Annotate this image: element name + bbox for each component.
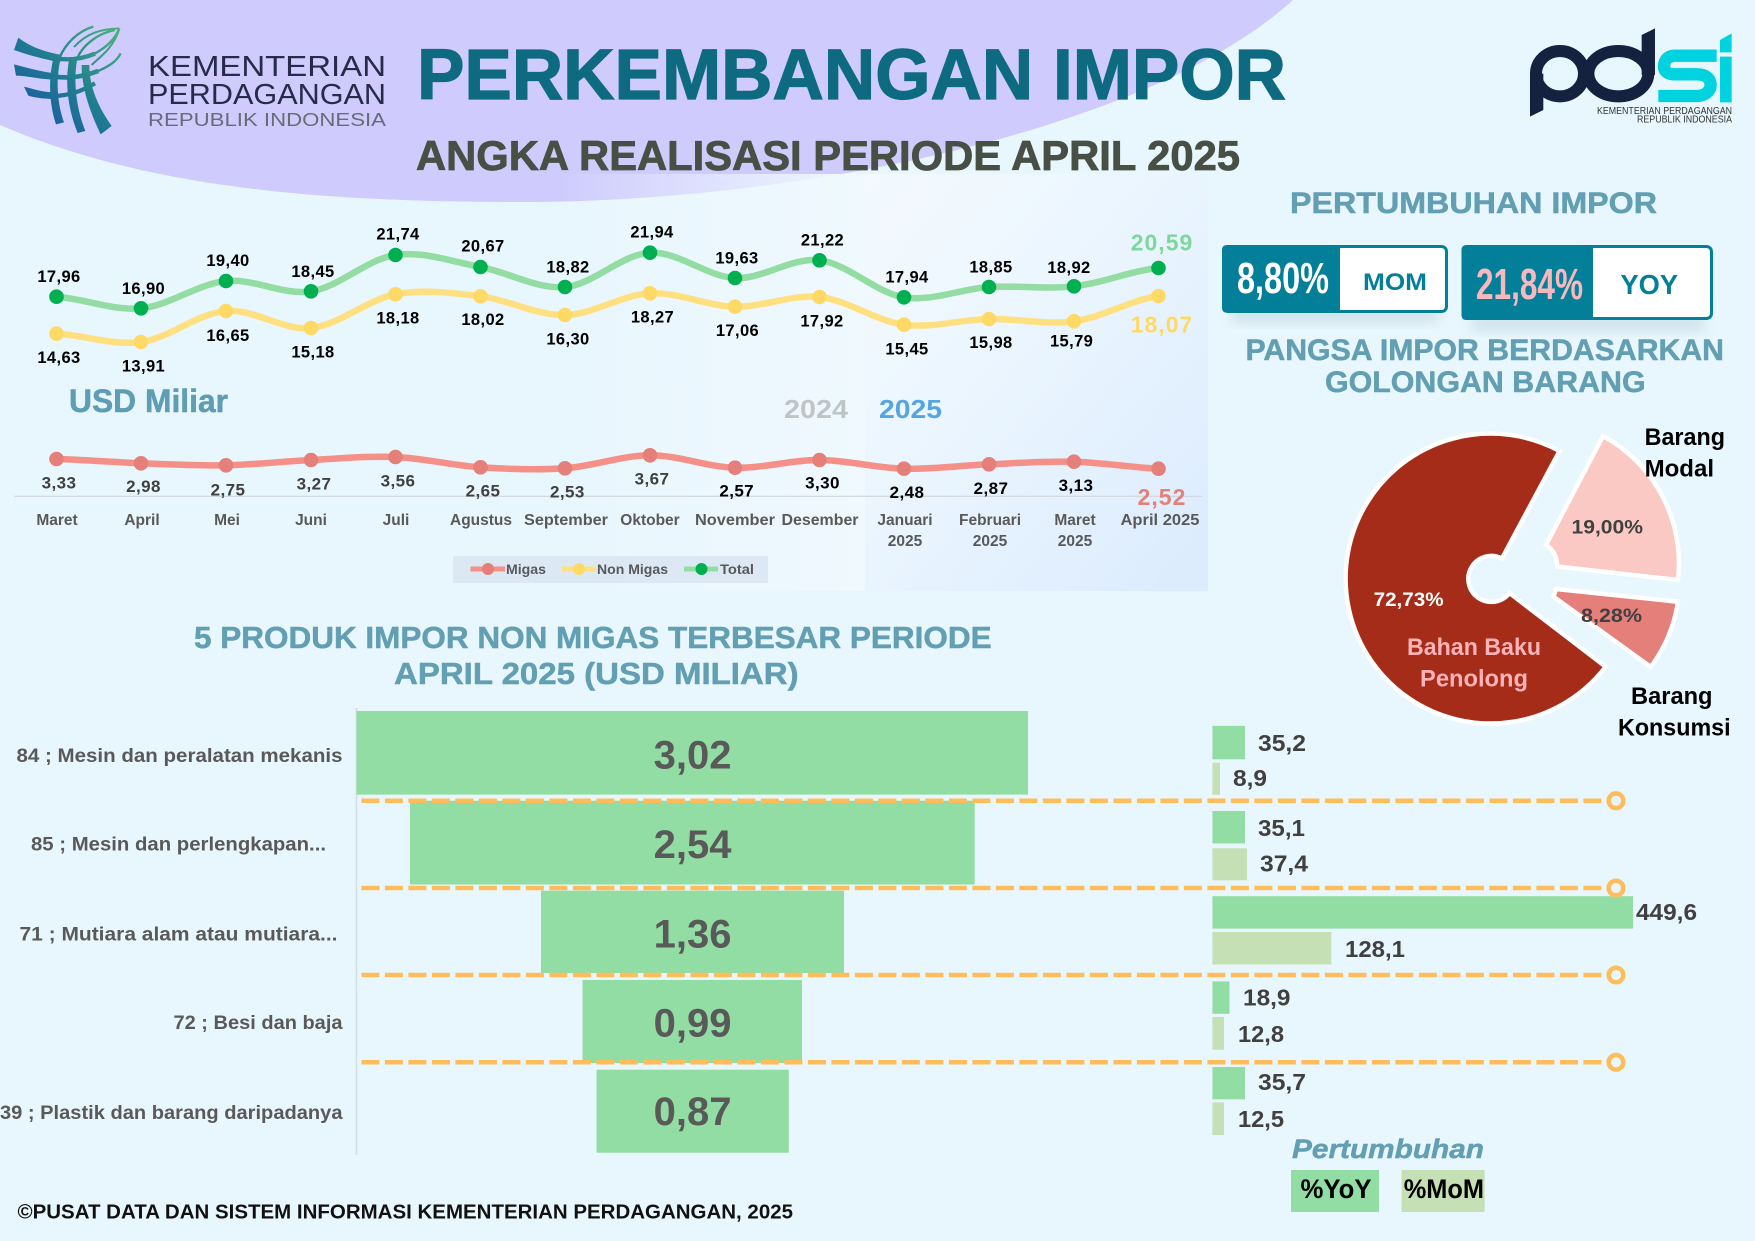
x axis month labels: Maret: [1054, 512, 1096, 529]
card: YoY growth: 21,84%: [1476, 260, 1583, 309]
heading: top 5 products: [194, 620, 992, 691]
series: Total: 21,74: [376, 226, 420, 244]
series: Total: 21,22: [801, 232, 844, 250]
series: Non Migas: [37, 286, 1193, 375]
logo wordmark: REPUBLIK INDONESIA: [148, 110, 386, 130]
x axis month labels: Oktober: [620, 512, 680, 529]
series: Non Migas: 18,27: [631, 308, 674, 326]
series: Non Migas: 17,06: [716, 322, 759, 340]
pdsi caption: KEMENTERIAN PERDAGANGAN: [1597, 106, 1732, 117]
series: Migas: 3,13: [1059, 476, 1093, 495]
slice: Barang Modal: [1546, 436, 1679, 580]
card: MoM growth: [1222, 245, 1446, 322]
series: Migas: 2,53: [550, 482, 585, 501]
x axis month labels: April 2025: [1120, 512, 1200, 529]
chart legend: Migas: [506, 561, 546, 577]
icon: Kemendag emblem: [14, 27, 121, 134]
growth row: HS 72: 12,8: [1238, 1021, 1284, 1047]
series: Total: 18,92: [1047, 259, 1091, 277]
growth bars: YoY and MoM: [1212, 726, 1697, 1135]
label: Barang Konsumsi: Barang: [1631, 683, 1712, 710]
series: Non Migas: 16,65: [206, 327, 250, 345]
slice: Barang Konsumsi: 8,28%: [1581, 606, 1642, 627]
series: Total: 17,96: [37, 268, 81, 286]
logo: PDSI: [1530, 28, 1732, 126]
x axis month labels: Mei: [214, 512, 240, 529]
year divider: [864, 197, 870, 591]
x axis month labels: November: [695, 512, 775, 529]
x axis month labels: Agustus: [450, 512, 512, 529]
x axis month labels: Desember: [782, 512, 858, 529]
title: PERKEMBANGAN IMPOR: [417, 36, 1286, 115]
series: Migas: 2,98: [126, 477, 161, 496]
pdsi caption: REPUBLIK INDONESIA: [1637, 114, 1732, 126]
2025 highlight panel: [560, 174, 1208, 591]
series: Migas: 3,33: [42, 473, 76, 492]
bar: HS 85: [31, 801, 975, 884]
card: MoM growth: 8,80%: [1237, 254, 1329, 303]
series: Total: 18,45: [291, 263, 335, 281]
bar: HS 84: 3,02: [654, 733, 732, 777]
label: Barang Modal: Modal: [1645, 456, 1714, 483]
bar: HS 84: [16, 711, 1028, 795]
slice: Bahan Baku Penolong: [1346, 434, 1606, 724]
chart legend: Total: [720, 561, 754, 577]
label: Barang Konsumsi: [1618, 683, 1731, 742]
slice: Barang Konsumsi: [1554, 589, 1678, 667]
bar: HS 72: [174, 980, 802, 1063]
slice: Bahan Baku Penolong: 72,73%: [1374, 590, 1444, 611]
x axis month labels: Februari: [959, 512, 1021, 529]
logo: Kementerian Perdagangan: [14, 27, 386, 134]
series: Migas: 3,67: [635, 470, 669, 489]
growth row: HS 71: 449,6: [1636, 899, 1697, 925]
x axis month labels: Maret: [36, 512, 78, 529]
legend: pertumbuhan: Pertumbuhan: [1292, 1134, 1484, 1164]
growth row: HS 85: 35,1: [1258, 815, 1305, 841]
growth row: HS 84: [1212, 726, 1306, 795]
growth row: HS 85: [1212, 811, 1308, 880]
bar: HS 72: 72 ; Besi dan baja: [174, 1012, 343, 1034]
year label 2024: 2024: [784, 394, 849, 424]
bar: HS 72: 0,99: [654, 1002, 732, 1046]
series: Migas: 2,75: [211, 480, 245, 499]
bar: HS 39: [0, 1070, 789, 1153]
chart legend: Non Migas: [597, 561, 668, 577]
bar: HS 71: 71 ; Mutiara alam atau mutiara...: [20, 924, 338, 946]
legend: pertumbuhan: %YoY: [1300, 1174, 1372, 1204]
chart legend: [453, 556, 768, 583]
bar: HS 71: [20, 891, 844, 973]
logo wordmark: PERDAGANGAN: [148, 79, 386, 111]
subtitle: ANGKA REALISASI PERIODE APRIL 2025: [416, 132, 1240, 179]
growth row: HS 72: [1212, 981, 1290, 1050]
series: Total: 20,59: [1131, 230, 1193, 256]
heading: pangsa impor: GOLONGAN BARANG: [1325, 366, 1646, 399]
slice: Barang Modal: 19,00%: [1572, 518, 1643, 538]
x axis month labels: [36, 512, 1200, 550]
series: Total: 18,82: [546, 258, 590, 276]
year label 2025: 2025: [879, 394, 942, 424]
heading: pangsa impor: PANGSA IMPOR BERDASARKAN: [1246, 334, 1724, 367]
heading: top 5 products: 5 PRODUK IMPOR NON MIGAS TERBESAR PERIODE: [194, 620, 992, 655]
x axis month labels: Januari: [877, 512, 933, 529]
series: Total: [37, 223, 1193, 316]
series: Non Migas: 18,07: [1131, 311, 1193, 337]
series: Total: 20,67: [461, 238, 505, 256]
card: YoY growth: YOY: [1620, 269, 1678, 300]
series: Non Migas: 16,30: [546, 330, 590, 348]
series: Migas: 2,52: [1138, 484, 1186, 510]
legend: pertumbuhan: [1291, 1134, 1485, 1212]
heading: top 5 products: APRIL 2025 (USD MILIAR): [394, 656, 799, 691]
growth row: HS 39: [1212, 1067, 1306, 1135]
growth row: HS 39: 35,7: [1258, 1069, 1306, 1095]
axis unit label: USD Miliar: [69, 383, 228, 419]
slice: Bahan Baku Penolong: Penolong: [1420, 666, 1528, 693]
footer copyright: ©PUSAT DATA DAN SISTEM INFORMASI KEMENTERIAN PERDAGANGAN, 2025: [18, 1202, 793, 1224]
dashed row separators: [361, 793, 1623, 1070]
series: Migas: [42, 448, 1186, 510]
pdsi caption: [1597, 106, 1732, 126]
bar: HS 39: 0,87: [654, 1090, 732, 1134]
bar: HS 85: 85 ; Mesin dan perlengkapan...: [31, 834, 326, 856]
slice: Bahan Baku Penolong: Bahan Baku: [1407, 634, 1541, 661]
growth row: HS 72: 18,9: [1243, 984, 1290, 1010]
label: Barang Konsumsi: Konsumsi: [1618, 715, 1731, 742]
heading: pangsa impor: [1246, 334, 1724, 399]
heading: pertumbuhan impor: PERTUMBUHAN IMPOR: [1290, 187, 1657, 220]
x axis month labels: 2025: [1058, 533, 1093, 550]
funnel bar chart: top 5 products: [0, 708, 1028, 1155]
series: Migas: 3,30: [805, 473, 840, 492]
series: Total: 18,85: [969, 258, 1013, 276]
series: Migas: 2,48: [890, 483, 924, 502]
legend: pertumbuhan: %MoM: [1404, 1174, 1484, 1204]
series: Non Migas: 15,18: [291, 343, 335, 361]
x axis month labels: Juli: [383, 512, 409, 529]
bar: HS 71: 1,36: [654, 912, 732, 956]
x axis month labels: September: [524, 512, 608, 529]
growth row: HS 71: 128,1: [1345, 936, 1405, 962]
logo wordmark: [148, 51, 386, 130]
series: Total: 19,40: [206, 252, 250, 270]
header lilac curved shape: [0, 0, 1293, 202]
series: Total: 19,63: [715, 249, 759, 267]
bar: HS 84: 84 ; Mesin dan peralatan mekanis: [16, 745, 343, 767]
growth row: HS 84: 35,2: [1258, 730, 1306, 756]
bar: HS 39: 39 ; Plastik dan barang daripadanya: [0, 1102, 343, 1124]
label: Barang Modal: [1645, 424, 1725, 483]
x axis month labels: 2025: [888, 533, 923, 550]
series: Total: 16,90: [122, 280, 165, 298]
growth row: HS 85: 37,4: [1260, 851, 1308, 877]
pie chart: share by goods category: [1346, 424, 1731, 742]
x axis month labels: April: [124, 512, 160, 529]
series: Non Migas: 13,91: [122, 357, 165, 375]
icon: pdsi letters: [1530, 28, 1732, 117]
series: Total: 17,94: [885, 268, 929, 286]
logo wordmark: KEMENTERIAN: [148, 51, 386, 83]
series: Migas: 3,27: [297, 474, 331, 493]
series: Non Migas: 15,79: [1050, 332, 1093, 350]
series: Non Migas: 15,98: [969, 334, 1013, 352]
growth row: HS 39: 12,5: [1238, 1106, 1284, 1132]
series: Non Migas: 18,02: [461, 311, 505, 329]
series: Non Migas: 15,45: [885, 340, 929, 358]
series: Total: 21,94: [630, 223, 674, 241]
series: Non Migas: 14,63: [37, 349, 81, 367]
bar: HS 85: 2,54: [654, 823, 732, 867]
series: Migas: 3,56: [381, 471, 415, 490]
growth row: HS 84: 8,9: [1233, 765, 1267, 791]
series: Non Migas: 17,92: [800, 312, 844, 330]
card: YoY growth: [1462, 245, 1712, 330]
panel: line chart: [14, 174, 1208, 591]
series: Migas: 2,65: [466, 481, 500, 500]
series: Migas: 2,87: [974, 479, 1008, 498]
series: Migas: 2,57: [719, 482, 754, 501]
series: Non Migas: 18,18: [376, 310, 420, 328]
x axis month labels: Juni: [295, 512, 327, 529]
growth row: HS 71: [1212, 896, 1697, 964]
label: Barang Modal: Barang: [1645, 424, 1725, 451]
x axis month labels: 2025: [973, 533, 1008, 550]
card: MoM growth: MOM: [1363, 269, 1427, 296]
